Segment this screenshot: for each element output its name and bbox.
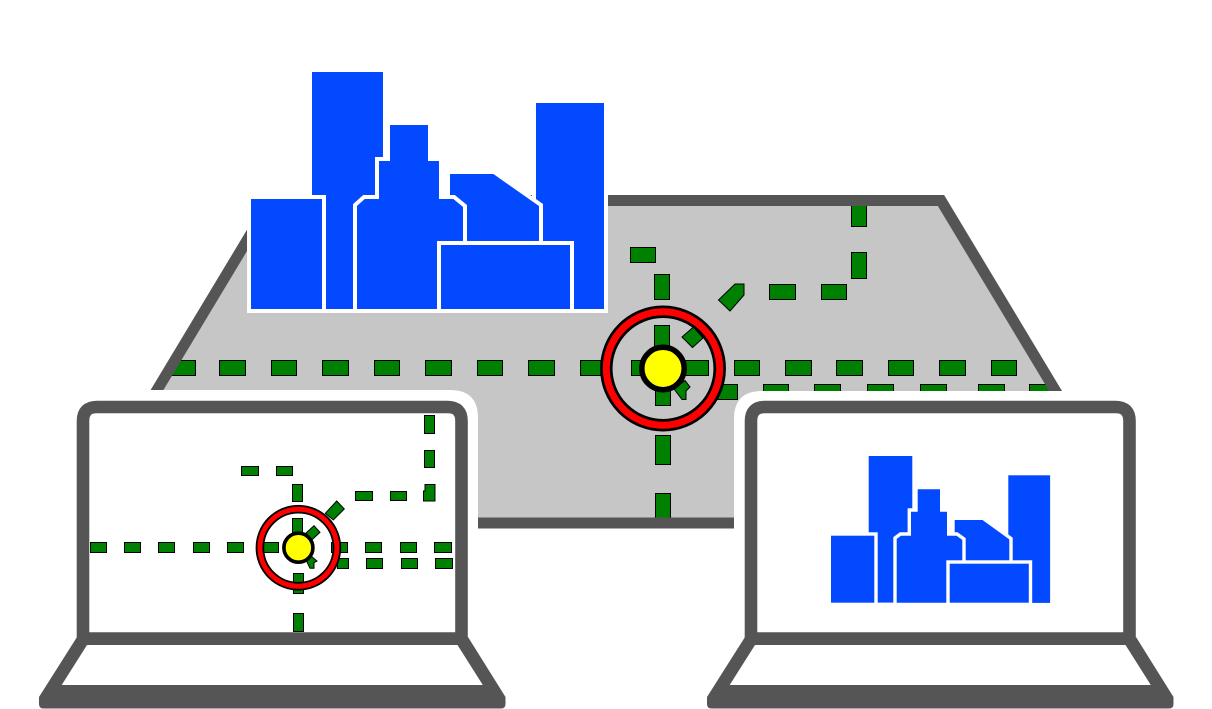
map: location marker (606, 312, 720, 425)
mini building: stepped central tower (895, 488, 964, 604)
building: tall left tower (310, 70, 385, 311)
map: green dashed roads (170, 204, 1054, 520)
left laptop: screen frame (83, 407, 462, 638)
map: plane outline (77, 200, 1135, 523)
left laptop: mini roads (90, 416, 452, 632)
right laptop: base (707, 637, 1174, 697)
building: left block (249, 197, 324, 311)
building: tall right tower (534, 101, 606, 311)
mini building: tall left tower (867, 454, 914, 604)
mini building: sloped roof block (953, 518, 1011, 604)
right laptop: mini city (829, 454, 1052, 605)
building: sloped roof block (448, 172, 541, 311)
mini building: left block (829, 534, 876, 604)
building: stepped central tower (355, 123, 465, 311)
building: front block (439, 243, 572, 311)
right laptop: screen frame (751, 407, 1130, 638)
right laptop: base front edge (707, 697, 1174, 708)
map: grey ground plane (77, 200, 1135, 523)
left laptop: base front edge (39, 697, 506, 708)
left laptop: base (39, 637, 506, 697)
mini building: tall right tower (1007, 474, 1052, 605)
left laptop: mini marker (260, 509, 337, 586)
map: blue city buildings (249, 70, 606, 311)
mini building: front block (948, 562, 1030, 604)
right laptop: white halo (734, 391, 1212, 709)
right laptop (707, 391, 1212, 709)
left laptop: white halo (0, 390, 478, 709)
left laptop (0, 390, 506, 709)
